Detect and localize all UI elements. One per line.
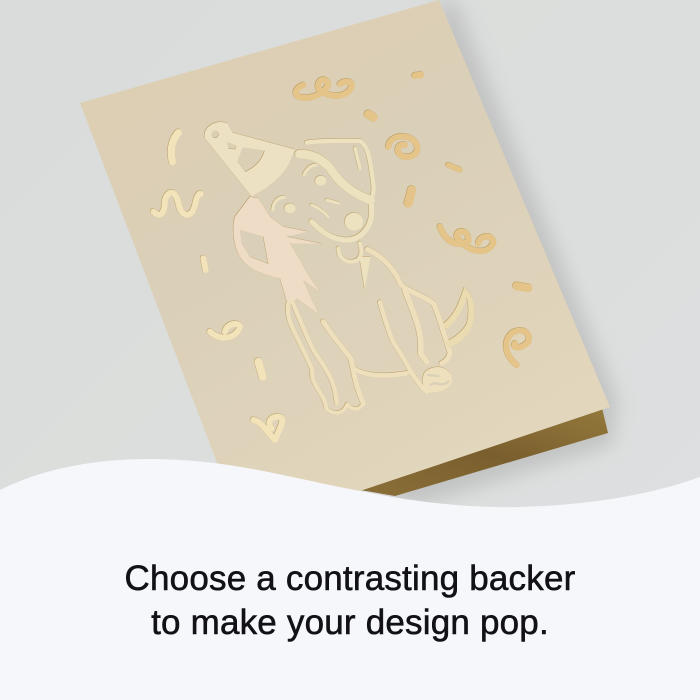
dog line art [204,122,474,413]
legs and body [288,249,450,413]
confetti: gold pieces [296,75,529,365]
party hat [204,122,295,197]
caption line 2: to make your design pop. [151,603,549,642]
kraft backer inside card [360,408,608,496]
card shadow [385,0,618,505]
eyes and nose [284,176,371,290]
confetti: pale pieces [153,133,282,440]
foil illustration: party dog and confetti [153,75,529,440]
card front [80,0,610,510]
white wave panel [0,459,700,700]
tail [443,287,474,347]
head, ear and facial strokes [273,141,374,262]
left ear and neck [233,197,323,314]
paw [423,367,452,393]
caption line 1: Choose a contrasting backer [125,559,575,598]
caption [125,559,575,642]
